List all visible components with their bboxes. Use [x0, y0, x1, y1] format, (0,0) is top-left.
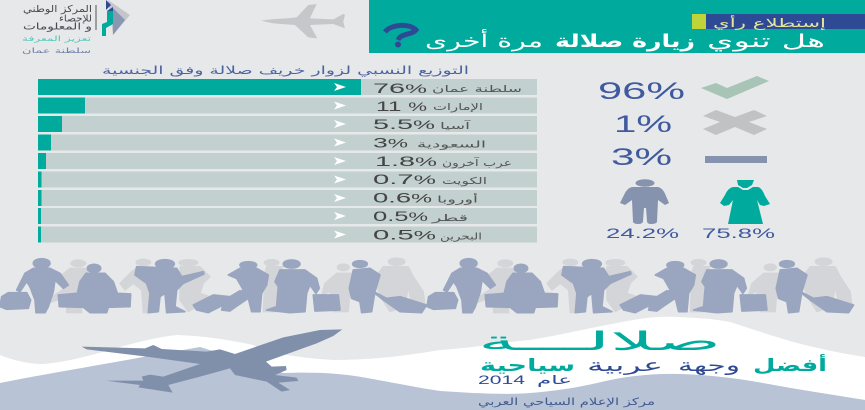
row: Europe: أوروبا: [437, 192, 479, 206]
tag: lime block: [692, 14, 706, 29]
stat: male 24.2%: 24.2%: [606, 225, 679, 241]
logo organisation name: للإحصاء: [59, 14, 92, 24]
row: Bahrain: [38, 226, 537, 242]
row: Asia: 5.5 %: [373, 116, 436, 132]
question heading: هل تنوي: [707, 31, 825, 52]
travellers silhouettes: [0, 258, 854, 313]
row: Saudi Arabia: السعودية: [417, 140, 486, 150]
subheading: best Arab tourist destination: عربية: [587, 356, 663, 376]
subheading: best Arab tourist destination: سياحية: [480, 356, 575, 376]
icon: dash: [705, 156, 767, 163]
stat: no 1%: 1%: [614, 111, 672, 138]
row: UAE: الإمارات: [433, 102, 483, 113]
row: UAE: 11 %: [376, 98, 428, 114]
chart title: التوزيع النسبي لزوار خريف صلالة وفق الجنسية: [102, 64, 469, 78]
question heading: زيارة صلالة: [555, 31, 695, 52]
year line: عام: [537, 373, 572, 387]
stat: undecided 3%: [611, 144, 767, 171]
stat: undecided 3%: 3%: [611, 144, 672, 171]
row: Europe: 0.6 %: [373, 190, 433, 206]
header panel: [369, 0, 865, 54]
row: Saudi Arabia: 3 %: [373, 134, 409, 150]
logo country: سلطنة عمان: [22, 47, 91, 55]
icon: large plane: [82, 329, 342, 393]
icon: check mark: [701, 76, 769, 99]
subheading: best Arab tourist destination: وجهة: [678, 356, 740, 376]
logo organisation name: المركز الوطني: [23, 4, 92, 15]
logo slogan: تعزيز المعرفة: [22, 35, 91, 43]
logo mark: [102, 0, 130, 36]
row: UAE: [38, 98, 537, 114]
row: other Arabs: عرب آخرون: [442, 156, 512, 169]
stat: yes 96%: 96%: [598, 78, 685, 105]
stat: male 24.2%: [606, 179, 679, 241]
source credit: مركز الإعلام السياحي العربي: [478, 397, 655, 408]
row: Saudi Arabia: [38, 134, 537, 150]
row: Bahrain: 0.5 %: [373, 226, 437, 242]
icon: cross: [703, 110, 767, 135]
row: Oman: 76 %: [373, 80, 428, 96]
row: Oman: سلطنة عمان: [432, 84, 522, 95]
icon: question mark: [385, 25, 416, 48]
row: Bahrain: البحرين: [440, 232, 482, 242]
background waves: [0, 317, 865, 410]
question heading: مرة أخرى: [425, 29, 543, 52]
year line: [478, 373, 572, 387]
tag text: إستطلاع رأي: [713, 15, 826, 31]
stat: female 75.8%: 75.8%: [702, 225, 775, 241]
year line: 2014: [478, 373, 526, 387]
stat: female 75.8%: [702, 180, 775, 241]
stat: no 1%: [614, 110, 767, 138]
subheading: best Arab tourist destination: [480, 354, 827, 376]
subheading: best Arab tourist destination: أفضل: [753, 354, 827, 376]
row: Kuwait: [38, 171, 537, 188]
icon: woman: [720, 180, 770, 224]
question heading: [425, 29, 825, 52]
row: other Arabs: 1.8 %: [375, 153, 438, 169]
row: Kuwait: 0.7 %: [373, 171, 437, 187]
row: Oman: [38, 79, 537, 96]
logo: [22, 0, 130, 55]
row: Qatar: قطر: [430, 213, 468, 224]
tag: blue strip: [706, 14, 865, 29]
stat: yes 96%: [598, 76, 769, 105]
heading: Salalah: صلالـــة: [478, 327, 721, 357]
bar chart: visitors by nationality: [38, 79, 537, 242]
row: Qatar: [38, 208, 537, 224]
logo organisation name: و المعلومات: [23, 22, 92, 32]
row: Europe: [38, 190, 537, 206]
icon: small plane: [261, 4, 345, 38]
row: other Arabs: [38, 153, 537, 169]
row: Qatar: 0.5 %: [373, 208, 429, 224]
row: Asia: [38, 116, 537, 132]
row: Kuwait: الكويت: [442, 176, 487, 187]
icon: man: [620, 179, 669, 224]
row: Asia: آسيا: [440, 119, 471, 132]
logo organisation name: [23, 4, 92, 32]
